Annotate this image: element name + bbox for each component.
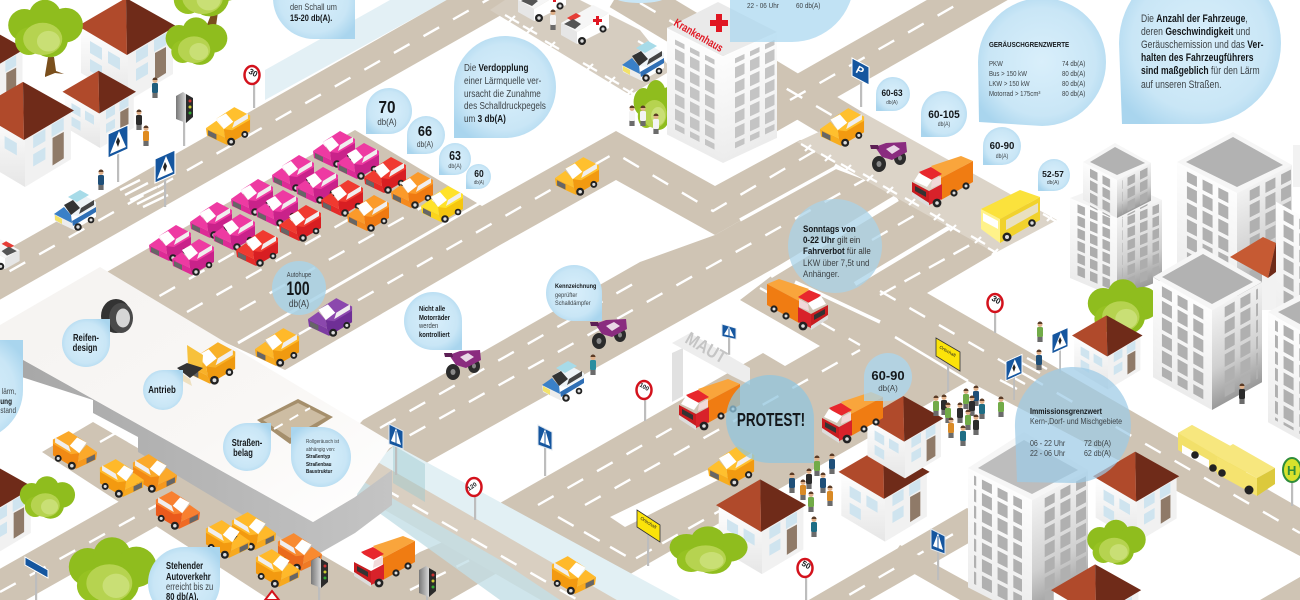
person <box>829 454 835 474</box>
callout: standing traffic: Autoverkehr <box>166 571 211 582</box>
parking lot: ambulance bays <box>490 0 672 96</box>
house: top left large <box>78 0 176 101</box>
icon: road surface patch <box>257 399 333 444</box>
callout: rolling noise <box>291 427 351 487</box>
callout: noise limits <box>978 0 1106 126</box>
person <box>811 516 817 537</box>
callout: rolling noise: Straßentyp <box>306 454 330 460</box>
callout: doubling: einer Lärmquelle ver- <box>464 74 541 86</box>
road: lower junction and toll road <box>500 195 1300 577</box>
sign: speed 30 <box>988 294 1003 333</box>
sign: motorway <box>722 324 736 355</box>
callout: sound reduction top: 15-20 db(A). <box>290 12 332 23</box>
car: pink <box>296 167 338 204</box>
bus: parking <box>981 190 1040 243</box>
bus: long articulated <box>1178 425 1275 496</box>
house: bottom left <box>0 461 34 559</box>
car: red <box>364 157 406 194</box>
callout: 60-90 lower: db(A) <box>878 384 898 393</box>
callout: 66 dB: db(A) <box>417 139 433 149</box>
tower: far right edge <box>1293 145 1300 187</box>
truck: bottom <box>354 536 415 587</box>
callout: 52-57: db(A) <box>1047 180 1059 186</box>
motorcycle: middle <box>590 319 627 349</box>
callout: vehicle count <box>1119 0 1281 124</box>
callout: rolling noise: abhängig von: <box>306 447 335 453</box>
callout: rolling noise: Rollgeräusch ist <box>306 439 339 445</box>
person <box>979 398 985 419</box>
callout: Sunday ban: Anhänger. <box>803 268 839 279</box>
tower: upper block <box>1083 143 1151 221</box>
motorcycle: parking <box>870 142 907 172</box>
callout: vehicle count: halten des Fahrzeugführers <box>1141 52 1254 64</box>
person <box>550 10 556 30</box>
callout: motorbikes: Nicht alle <box>419 306 445 313</box>
person <box>945 402 951 423</box>
person <box>820 472 826 493</box>
sign: warning triangle <box>265 591 279 600</box>
car: pink <box>337 143 379 180</box>
callout: noise limits: PKW <box>989 61 1003 68</box>
car: queue <box>133 454 177 493</box>
callout: left edge cut off: ung <box>0 396 12 406</box>
sign: speed 30: 30 <box>990 294 1003 306</box>
callout: rolling noise: Baustruktur <box>306 469 332 475</box>
callout: marking: Kennzeichnung <box>555 283 597 290</box>
callout: doubling: ursacht die Zunahme <box>464 87 541 99</box>
hospital <box>667 2 777 163</box>
hospital: name: Krankenhaus <box>671 17 725 55</box>
traffic light <box>311 557 328 600</box>
tower: centre right <box>1153 248 1262 410</box>
sign: pedestrian crossing <box>1052 327 1068 373</box>
traffic light <box>419 566 436 600</box>
callout: night limit top: 60 db(A) <box>796 3 820 10</box>
ambulance: top <box>518 0 566 22</box>
callout: drive <box>143 370 183 410</box>
road: tunnel exit with barrier <box>350 445 680 600</box>
callout: 60-63 <box>876 77 910 111</box>
car: orange <box>347 195 389 232</box>
callout: motorbikes: kontrolliert <box>419 332 450 339</box>
road: truck road bottom <box>340 530 520 600</box>
callout: protest: PROTEST! <box>737 410 805 431</box>
gantry: pillar <box>672 348 683 402</box>
person <box>629 106 635 126</box>
callout: night limit top <box>613 0 854 42</box>
road: lower left <box>0 490 180 600</box>
callout: horn 100 dB: 100 <box>286 278 310 300</box>
car: below bridge <box>552 556 596 595</box>
sign: motorway <box>931 529 945 580</box>
truck: parking <box>912 156 973 207</box>
callout: road surface <box>223 423 271 471</box>
callout: 52-57 <box>1038 159 1070 191</box>
car: red <box>279 205 321 242</box>
callout: left edge cut off <box>0 340 23 440</box>
callout: 70 dB <box>366 88 412 134</box>
sign: pedestrian crossing <box>1006 354 1022 400</box>
callout: left edge cut off: lärm, <box>2 386 16 396</box>
road: wide lanes and hospital bend <box>105 130 850 370</box>
ambulance: left edge <box>0 234 20 270</box>
sign: speed 50 <box>798 559 813 600</box>
callout: horn 100 dB: Autohupe <box>287 271 311 279</box>
callout: Sunday ban <box>788 199 882 293</box>
sign: bus stop <box>1283 458 1300 506</box>
house: protest right <box>838 446 930 542</box>
callout: 70 dB: 70 <box>378 97 396 117</box>
sign: speed 100 <box>636 381 652 421</box>
callout: vehicle count: auf unseren Straßen. <box>1141 79 1222 91</box>
car: pink <box>256 190 298 227</box>
hospital: right wall <box>723 31 777 163</box>
callout: noise limits: Motorrad > 175cm³ <box>989 91 1041 98</box>
callout: emission limit <box>1015 367 1131 483</box>
traffic light <box>176 92 193 146</box>
callout: emission limit: 62 db(A) <box>1084 448 1111 458</box>
car: queue <box>53 431 97 470</box>
elevated deck with cross-section of tyre, drive and road surface <box>0 267 393 557</box>
sign: speed 30 top: 30 <box>247 67 260 79</box>
callout: emission limit: 72 db(A) <box>1084 438 1111 448</box>
callout: 60-90 lower: 60-90 <box>871 368 905 383</box>
sign: parking: P <box>854 64 866 78</box>
road: upper right and hospital approach <box>620 0 1020 135</box>
callout: motorbikes: werden <box>418 323 439 330</box>
callout: doubling: des Schalldruckpegels <box>464 99 546 111</box>
tower: far right top <box>1276 202 1300 355</box>
tree: bottom left <box>69 537 157 600</box>
car: yellow top road <box>206 107 250 146</box>
car: purple <box>308 298 352 337</box>
sign: speed 30 top <box>244 66 260 108</box>
callout: noise limits: 80 db(A) <box>1062 71 1085 78</box>
icon: tyre <box>101 299 133 333</box>
house: right of front block <box>1093 452 1179 542</box>
house: red roof behind towers <box>1230 237 1276 310</box>
person <box>1036 350 1042 370</box>
callout: Sunday ban: LKW über 7,5t und <box>803 257 870 268</box>
bush: behind tower <box>1088 279 1159 334</box>
trees and bushes <box>8 0 748 600</box>
truck: facing right <box>767 279 828 330</box>
callout: 66 dB: 66 <box>418 122 432 139</box>
people <box>98 10 1245 537</box>
person <box>973 414 979 435</box>
sign: one way <box>25 557 48 600</box>
motorcycle: left <box>444 350 481 380</box>
person <box>1239 384 1245 404</box>
callout: tyre design: Reifen- <box>73 332 99 343</box>
callout: 60 dB: 60 <box>474 168 484 179</box>
callout: 60-105 <box>921 91 967 137</box>
callout: 60-90 lower <box>864 353 912 401</box>
car: queue <box>232 512 276 551</box>
callout: Sunday ban: Fahrverbot für alle <box>803 245 871 256</box>
car: protest road <box>708 446 754 487</box>
queue: cars bottom left <box>53 431 322 588</box>
person <box>152 78 158 98</box>
car: queue red orange <box>156 491 200 530</box>
sign: speed 120 <box>466 478 482 520</box>
bush: bottom left <box>20 476 75 519</box>
person <box>789 472 795 493</box>
person <box>590 354 596 375</box>
person <box>640 106 646 126</box>
callout: 60-105: 60-105 <box>928 109 960 121</box>
callout: noise limits: 80 db(A) <box>1062 91 1085 98</box>
callout: rolling noise: Straßenbau <box>306 462 332 468</box>
callout: noise limits: Bus > 150 kW <box>989 71 1027 78</box>
callout: doubling <box>454 36 556 138</box>
house: small by crossing <box>62 71 136 148</box>
house: small behind bubble <box>1072 315 1143 390</box>
person <box>827 486 833 506</box>
tree: top <box>167 0 245 31</box>
zebra crossing <box>1000 354 1055 389</box>
callout: noise limits: 74 db(A) <box>1062 61 1085 68</box>
person <box>969 396 975 416</box>
road: upper left avenue <box>0 0 540 288</box>
person <box>653 114 659 134</box>
person <box>143 126 149 146</box>
callout: 60-63: 60-63 <box>881 88 903 98</box>
car: pink <box>149 225 191 262</box>
car: pink <box>272 155 314 192</box>
hospital: left wall <box>667 27 723 163</box>
callout: left edge cut off: stand <box>0 405 16 415</box>
person <box>98 170 104 190</box>
callout: noise limits: GERÄUSCHGRENZWERTE <box>989 41 1070 49</box>
callout: road surface: belag <box>233 447 253 458</box>
road: bottom right stubs <box>740 508 1300 600</box>
person <box>965 410 971 430</box>
police: hospital <box>622 41 664 82</box>
callout: 60 dB <box>466 164 491 189</box>
barrier: glass at tunnel mouth <box>393 445 425 502</box>
house: bottom right <box>1051 564 1141 600</box>
truck: toll <box>679 379 740 430</box>
callout: marking: Schalldämpfer <box>555 300 591 307</box>
house: small near crowd <box>865 396 943 478</box>
tower: stepped <box>1070 143 1162 298</box>
car: hospital road <box>555 157 599 196</box>
callout: 60-90 upper: db(A) <box>996 154 1008 160</box>
sign: pedestrian crossing <box>155 150 175 207</box>
callout: 60-90 upper <box>983 127 1021 165</box>
person <box>933 396 939 416</box>
toll gantry <box>672 328 750 402</box>
callout: vehicle count: Geräuschemission und das Ver- <box>1141 39 1264 51</box>
callout: 63 dB: 63 <box>449 149 461 163</box>
bush: lower right <box>1087 520 1146 565</box>
sign: town limit: Ortschaft <box>639 516 658 530</box>
car: orange <box>391 172 433 209</box>
callout: marking <box>546 265 602 321</box>
sign: motorway <box>538 425 552 476</box>
callout: 63 dB <box>439 143 471 175</box>
callout: emission limit: Kern-,Dorf- und Mischgebiete <box>1030 416 1122 426</box>
person <box>814 456 820 476</box>
car: queue orange <box>278 533 322 572</box>
road: queue road under bridge <box>42 422 400 600</box>
tower: lower block <box>1070 180 1162 298</box>
callout: night limit top: 22 - 06 Uhr <box>747 3 779 10</box>
house: protest left <box>716 479 806 574</box>
hospital: roof <box>667 2 777 56</box>
gantry: text MAUT: MAUT <box>682 328 731 368</box>
sign: speed 120: 120 <box>467 482 479 493</box>
car: queue <box>206 520 250 559</box>
sign: parking <box>852 58 869 107</box>
callout: emission limit: 06 - 22 Uhr <box>1030 438 1066 448</box>
car: queue <box>256 549 300 588</box>
callout: sound reduction top <box>273 0 355 39</box>
person <box>808 492 814 512</box>
person <box>973 386 979 406</box>
person <box>136 110 142 130</box>
callout: drive: Antrieb <box>148 384 176 395</box>
house: left large <box>0 82 74 187</box>
sign: town limit <box>936 338 960 392</box>
deck: top surface <box>0 267 393 522</box>
car: pink <box>190 202 232 239</box>
queue of red cars <box>236 157 406 267</box>
callout: Sunday ban: Sonntags von <box>803 223 856 234</box>
car: pink <box>172 239 214 276</box>
sign: town limit <box>637 510 660 566</box>
bush: top <box>166 17 227 65</box>
callout: marking: geprüfter <box>555 292 577 299</box>
car: pink <box>231 179 273 216</box>
road: multi lane trunk road <box>340 165 905 500</box>
bush: protest <box>670 526 748 574</box>
callout: emission limit: 22 - 06 Uhr <box>1030 448 1066 458</box>
car: red <box>236 230 278 267</box>
person <box>998 396 1004 417</box>
callout: noise limits: 80 db(A) <box>1062 81 1085 88</box>
noise barrier: top left <box>265 0 447 100</box>
callout: vehicle count: Die Anzahl der Fahrzeuge, <box>1141 13 1248 25</box>
person <box>806 468 812 489</box>
truck: protest <box>822 392 883 443</box>
callout: tyre design: design <box>73 342 98 353</box>
person <box>941 394 947 415</box>
car: parking <box>820 108 864 147</box>
person <box>948 418 954 438</box>
callout: Sunday ban: 0-22 Uhr gilt ein <box>803 234 860 245</box>
callout: tyre design <box>62 319 110 367</box>
tower: far right lower <box>1268 285 1300 450</box>
sign: speed 50: 50 <box>800 559 813 571</box>
callout: 60-90 upper: 60-90 <box>990 141 1015 152</box>
bush: hospital <box>634 80 679 130</box>
person <box>963 388 969 409</box>
tree: top left <box>8 0 83 77</box>
person <box>960 426 966 446</box>
sign: motorway <box>389 424 403 475</box>
callout: standing traffic: Stehender <box>166 560 204 571</box>
car: pink back row <box>313 131 355 168</box>
callout: horn 100 dB <box>272 261 326 315</box>
callout: horn 100 dB: db(A) <box>289 298 309 309</box>
callout: standing traffic <box>148 547 220 600</box>
person <box>957 402 963 423</box>
tower: wide <box>1177 132 1292 308</box>
callout: 70 dB: db(A) <box>377 116 397 127</box>
callout: protest <box>726 375 814 463</box>
callout: emission limit: Immissionsgrenzwert <box>1030 406 1102 416</box>
callout: motorbikes: Motorräder <box>419 315 450 322</box>
queue of pink cars <box>149 131 379 276</box>
callout: doubling: um 3 db(A) <box>464 112 506 124</box>
callout: 52-57: 52-57 <box>1042 169 1064 179</box>
callout: vehicle count: deren Geschwindigkeit und <box>1141 26 1250 38</box>
ambulance: hospital <box>561 5 609 45</box>
car: yellow <box>421 186 463 223</box>
deck: side faces <box>0 347 392 557</box>
callout: 60-63: db(A) <box>886 100 898 106</box>
callout: vehicle count: sind maßgeblich für den Lärm <box>1141 65 1260 77</box>
callout: 63 dB: db(A) <box>448 164 462 170</box>
hospital: red cross <box>710 14 728 32</box>
police: left <box>54 190 96 231</box>
callout: doubling: Die Verdopplung <box>464 61 529 73</box>
car: engine open <box>177 342 235 386</box>
car: red <box>321 180 363 217</box>
gantry: beam <box>672 333 750 385</box>
callout: 60-105: db(A) <box>938 122 950 128</box>
sign: pedestrian crossing <box>108 125 128 182</box>
callout: motorbikes <box>404 292 462 350</box>
callout: noise limits: LKW > 150 kW <box>989 81 1030 88</box>
callout: 66 dB <box>407 116 445 154</box>
callout: sound reduction top: den Schall um <box>290 1 337 12</box>
callout: 60 dB: db(A) <box>474 180 484 185</box>
police: middle <box>542 361 584 402</box>
person <box>800 480 806 500</box>
sign: town limit: Ortschaft <box>938 345 957 358</box>
sign: bus stop: H <box>1287 463 1296 478</box>
house: left edge <box>0 23 25 116</box>
car: queue <box>100 459 144 498</box>
callout: road surface: Straßen- <box>232 437 262 448</box>
car: pink <box>213 214 255 251</box>
callout: standing traffic: erreicht bis zu <box>166 581 213 592</box>
building: front large <box>968 432 1088 600</box>
sign: speed 100: 100 <box>638 383 650 393</box>
parking lot: right hand bays <box>797 112 1057 256</box>
person <box>1037 322 1043 342</box>
car: orange middle road <box>255 328 299 367</box>
